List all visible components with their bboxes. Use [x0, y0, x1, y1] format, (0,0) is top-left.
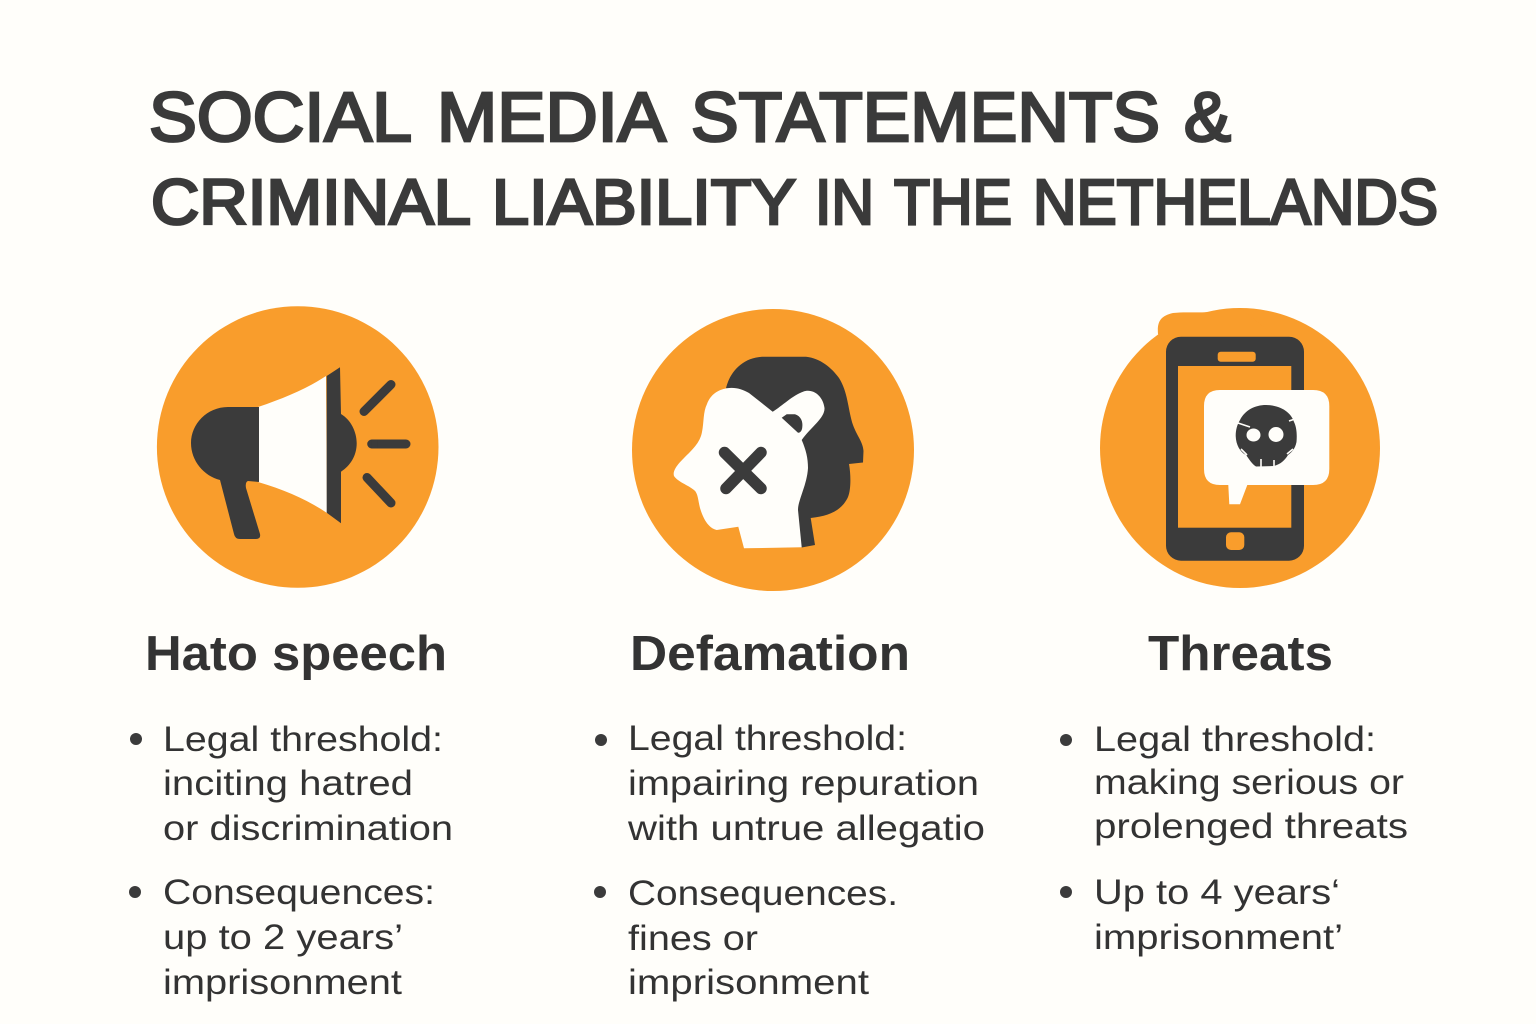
icon: head with x	[632, 309, 914, 591]
bullet list: defamation consequences: imprisonment	[628, 963, 869, 1002]
bullet list: hato speech consequences	[129, 873, 435, 1002]
bullet list: defamation threshold: Legal threshold:	[628, 719, 907, 758]
bullet list: threats consequences: imprisonment’	[1094, 918, 1343, 957]
bullet list: defamation threshold: with untrue allegatio	[627, 809, 985, 848]
title: THE	[894, 166, 1012, 238]
bullet list: defamation consequences: Consequences.	[628, 874, 898, 913]
bullet list: defamation threshold	[595, 719, 985, 848]
panel: hate speech	[129, 306, 453, 1002]
title: IN	[815, 166, 874, 238]
bullet list: defamation threshold: impairing repuration	[628, 764, 979, 803]
title: STATEMENTS	[691, 78, 1160, 156]
bullet list: hato speech threshold: Legal threshold:	[163, 720, 443, 759]
icon: megaphone	[157, 306, 438, 588]
bullet list: threats consequences	[1060, 873, 1343, 957]
title	[149, 78, 1438, 238]
heading: hato speech: Hato speech	[145, 627, 447, 681]
panel: threats	[1060, 308, 1408, 957]
title: LIABILITY	[492, 166, 796, 238]
bullet list: hato speech threshold	[130, 720, 453, 848]
title: SOCIAL	[149, 78, 412, 156]
bullet list: hato speech threshold: or discrimination	[163, 809, 453, 848]
icon: phone with skull message	[1100, 308, 1380, 588]
title: MEDIA	[437, 78, 666, 156]
bullet list: defamation consequences: fines or	[628, 919, 758, 958]
bullet list: hato speech consequences: Consequences:	[163, 873, 435, 912]
heading: threats: Threats	[1148, 627, 1333, 681]
bullet list: threats threshold	[1060, 720, 1408, 846]
bullet list: threats threshold: Legal threshold:	[1094, 720, 1376, 759]
title: NETHELANDS	[1033, 166, 1438, 238]
panel: defamation	[594, 309, 985, 1002]
bullet list: hato speech consequences: imprisonment	[163, 963, 402, 1002]
bullet list: threats consequences: Up to 4 years‘	[1094, 873, 1340, 912]
bullet list: hato speech threshold: inciting hatred	[163, 764, 413, 803]
bullet list: threats threshold: making serious or	[1094, 763, 1404, 802]
bullet list: threats threshold: prolenged threats	[1094, 807, 1408, 846]
bullet list: defamation consequences	[594, 874, 898, 1002]
bullet list: hato speech consequences: up to 2 years’	[163, 918, 403, 957]
title: &	[1184, 78, 1231, 156]
heading: defamation: Defamation	[630, 627, 910, 681]
title: CRIMINAL	[151, 166, 471, 238]
